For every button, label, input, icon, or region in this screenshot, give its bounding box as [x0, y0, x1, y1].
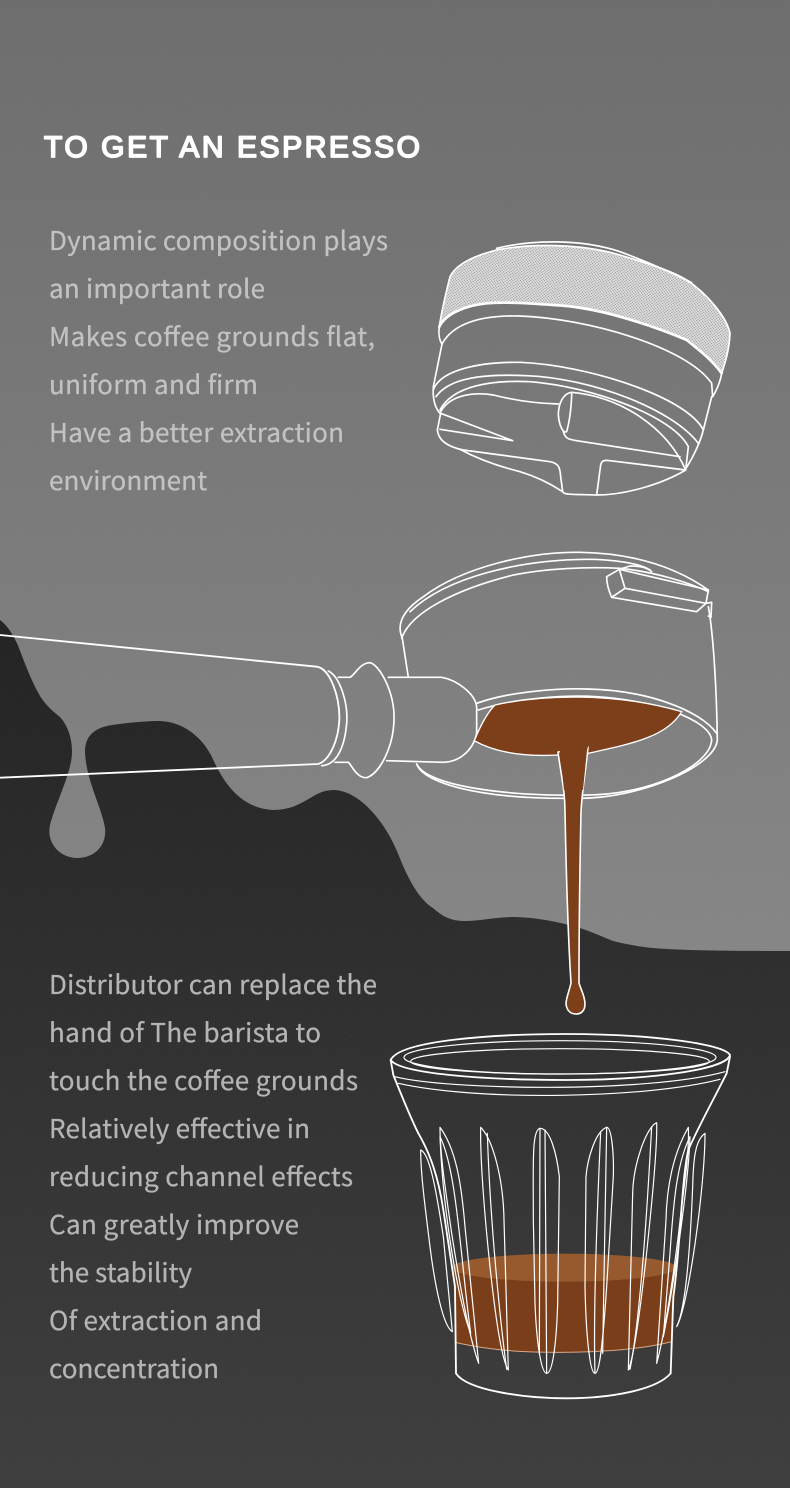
background: upper grey	[0, 0, 790, 1000]
coffee stream and drop	[558, 747, 588, 1014]
icon: portafilter basket with coffee	[387, 552, 717, 798]
espresso in glass	[452, 1254, 677, 1352]
text block: upper description: an important role	[49, 269, 265, 306]
text block: upper description: Have a better extraction	[49, 413, 344, 450]
text block: lower description	[49, 965, 377, 1386]
icon: fluted espresso glass	[391, 1034, 730, 1398]
text block: lower description: reducing channel effects	[49, 1157, 353, 1194]
tool outline	[433, 242, 730, 495]
text block: lower description: concentration	[49, 1349, 219, 1386]
text block: lower description: hand of The barista to	[49, 1013, 321, 1050]
text block: upper description: environment	[49, 461, 207, 498]
stream top fill	[557, 740, 590, 790]
text block: upper description: uniform and firm	[49, 365, 258, 402]
background: dark liquid shape with drip	[0, 620, 790, 1488]
coffee pool	[474, 697, 682, 773]
text block: lower description: Can greatly improve	[49, 1205, 299, 1242]
text block: lower description: Relatively effective in	[49, 1109, 310, 1146]
icon: coffee distributor tool	[433, 242, 730, 495]
glass flutes	[404, 1041, 716, 1373]
text block: lower description: touch the coffee grounds	[49, 1061, 358, 1098]
text block: upper description: Dynamic composition plays	[49, 221, 388, 258]
text block: lower description: the stability	[49, 1253, 192, 1290]
title: TO GET AN ESPRESSO	[44, 131, 420, 164]
text block: upper description	[49, 221, 388, 498]
text block: lower description: Distributor can replace the	[49, 965, 377, 1002]
text block: upper description: Makes coffee grounds flat,	[49, 317, 375, 354]
text block: lower description: Of extraction and	[49, 1301, 262, 1338]
knurled band	[439, 245, 730, 373]
icon: portafilter handle	[0, 635, 394, 778]
glass outline	[391, 1034, 730, 1398]
